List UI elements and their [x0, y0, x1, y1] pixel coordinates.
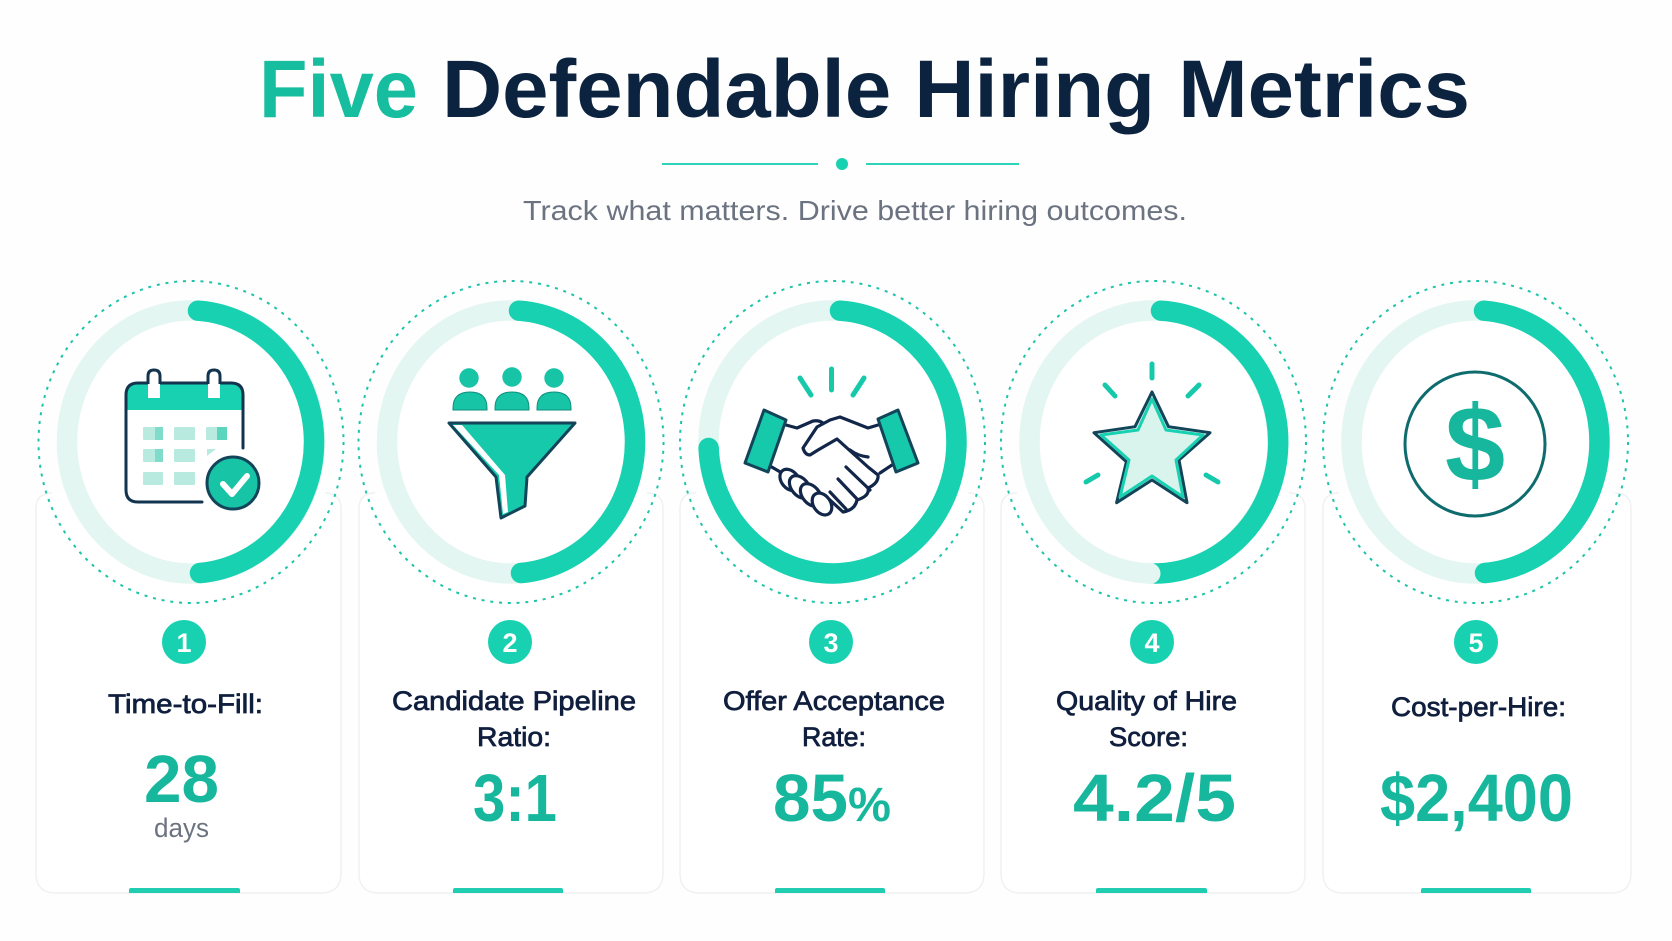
label: Rate:	[802, 722, 866, 752]
label	[1056, 686, 1237, 752]
card outline	[1001, 493, 1305, 893]
title: Five	[259, 44, 418, 135]
label	[723, 686, 945, 752]
number badge	[809, 620, 853, 664]
icon: star	[1086, 364, 1218, 503]
title: Defendable Hiring Metrics	[442, 44, 1470, 135]
subtitle: Track what matters. Drive better hiring outcomes.	[523, 195, 1187, 226]
accent bar	[129, 888, 240, 893]
panel: offer acceptance rate	[680, 281, 985, 893]
accent bar	[775, 888, 885, 893]
title divider	[662, 158, 1019, 170]
number badge	[1454, 620, 1498, 664]
card outline	[359, 493, 663, 893]
number badge: 4	[1144, 628, 1160, 658]
progress ring	[1323, 281, 1628, 603]
icon: calendar with check	[126, 370, 259, 509]
panel: quality of hire score	[1001, 281, 1306, 893]
label: Score:	[1109, 722, 1188, 752]
card outline	[1323, 493, 1631, 893]
label: Cost-per-Hire:	[1391, 692, 1566, 722]
value: 4.2/5	[1073, 761, 1236, 836]
accent bar	[1096, 888, 1207, 893]
value: 28	[144, 742, 219, 817]
number badge: 5	[1468, 628, 1484, 658]
value: $2,400	[1380, 761, 1573, 836]
icon: dollar coin	[1405, 372, 1545, 516]
icon: dollar coin: $	[1445, 383, 1505, 504]
number badge: 1	[176, 628, 192, 658]
progress ring	[680, 281, 985, 603]
panel: cost-per-hire	[1323, 281, 1631, 893]
card outline	[36, 493, 341, 893]
value: 3:1	[473, 761, 557, 836]
label: Ratio:	[477, 722, 551, 752]
label: Candidate Pipeline	[392, 686, 636, 716]
number badge	[1130, 620, 1174, 664]
label: Offer Acceptance	[723, 686, 945, 716]
progress ring	[1001, 281, 1306, 603]
number badge	[162, 620, 206, 664]
card outline	[680, 493, 984, 893]
icon: handshake	[745, 369, 918, 519]
number badge: 2	[502, 628, 518, 658]
progress ring	[38, 281, 344, 603]
accent bar	[453, 888, 563, 893]
label	[392, 686, 636, 752]
accent bar	[1421, 888, 1531, 893]
icon: funnel with people	[449, 367, 575, 518]
number badge: 3	[823, 628, 839, 658]
value: 85%	[773, 761, 891, 836]
panel: time-to-fill	[36, 281, 344, 893]
progress ring	[358, 281, 664, 603]
label: Quality of Hire	[1056, 686, 1237, 716]
label: Time-to-Fill:	[108, 689, 263, 719]
panel: candidate pipeline ratio	[358, 281, 664, 893]
unit: days	[154, 813, 209, 843]
number badge	[488, 620, 532, 664]
